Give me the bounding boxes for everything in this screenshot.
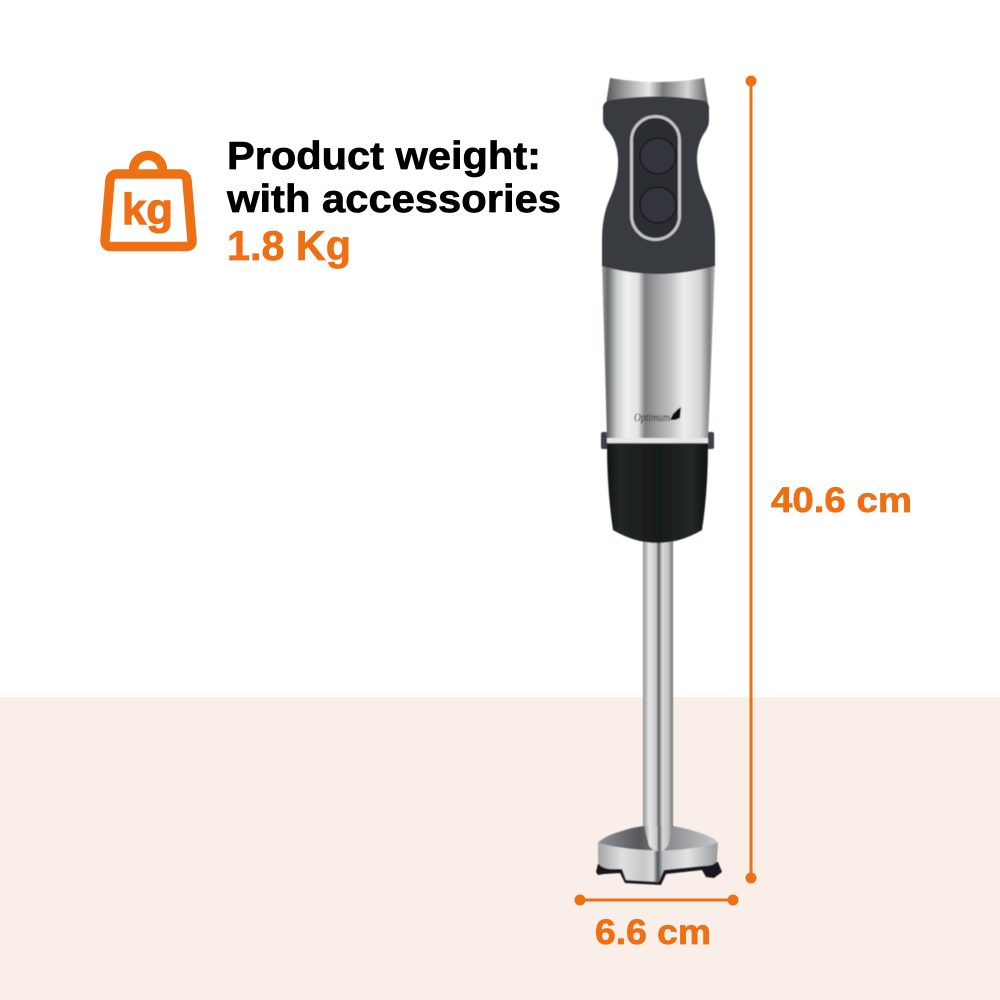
top collar: [606, 78, 708, 104]
heading: product weight: Product weight:: [227, 135, 541, 178]
height label: 40.6 cm: [771, 481, 912, 520]
weight value: 1.8 Kg: [227, 222, 351, 269]
icon: kg weight bag: [105, 156, 192, 246]
product: hand blender: [596, 78, 722, 885]
logo: Optimum: [634, 410, 670, 424]
shaft: [643, 535, 673, 835]
heading: product weight: [226, 135, 561, 221]
button panel: [632, 116, 680, 240]
width label: 6.6 cm: [595, 913, 711, 952]
rubber handle: [602, 96, 715, 274]
background band: [0, 697, 1000, 1000]
button: power: [640, 138, 676, 174]
black cup: [607, 444, 708, 543]
metal ring: [607, 438, 708, 444]
side latches: [601, 432, 609, 449]
blade guard: [596, 826, 722, 885]
heading: product weight: with accessories: [226, 178, 561, 221]
motor body steel: [602, 262, 715, 440]
icon label: kg: kg: [122, 185, 173, 234]
dimension arrow: width: [574, 894, 738, 906]
dimension arrow: height: [746, 76, 756, 884]
button: turbo: [640, 187, 676, 223]
